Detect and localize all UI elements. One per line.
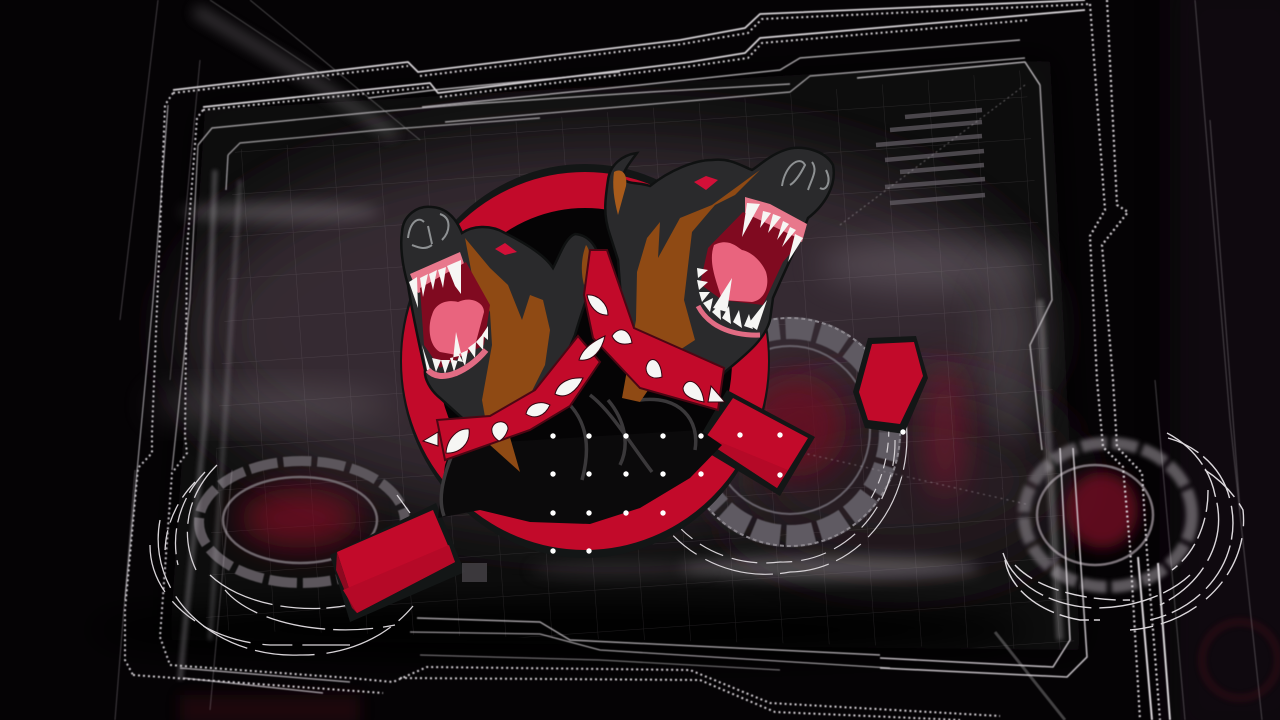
right dog collar: [584, 250, 725, 410]
left frame lines: [115, 0, 240, 720]
right dog lower teeth: [697, 268, 767, 330]
left dog ear tan: [582, 245, 590, 285]
right frame lines: [880, 0, 1262, 720]
right bar: [695, 390, 815, 496]
left dog mouth: [420, 262, 490, 368]
left dog head: [401, 207, 598, 472]
ring: [413, 177, 757, 545]
white dot grid: [550, 429, 906, 554]
left dog gum: [410, 252, 468, 293]
left dog eye: [495, 243, 517, 255]
top-left light streak: [195, 10, 395, 135]
data bars top right: [876, 110, 985, 203]
dog bodies: [438, 395, 722, 524]
left dog snout lines: [408, 214, 448, 248]
right dog snout lines: [782, 161, 828, 190]
right dog head: [605, 148, 834, 405]
bottom frame lines: [133, 618, 1065, 720]
left dog brown neck: [465, 238, 550, 472]
gauge: centre right: [668, 318, 907, 574]
left dog lower teeth: [422, 326, 488, 374]
left dog upper teeth: [409, 260, 461, 308]
collar spikes: [587, 295, 725, 402]
right dog ear tan: [613, 171, 626, 215]
left dog collar: [423, 336, 605, 460]
hexagon piece: [853, 336, 928, 434]
collar spikes: [423, 336, 605, 453]
left bar: [330, 503, 487, 622]
emblem: [330, 148, 928, 622]
right dog mouth: [700, 212, 802, 305]
right dog tongue: [712, 242, 767, 302]
top frame lines: [173, 0, 1090, 155]
gauge: right: [1003, 433, 1244, 630]
right dog upper teeth: [742, 203, 803, 262]
right dog brown neck: [622, 170, 760, 402]
target lines: [840, 85, 1025, 225]
right dog gum: [745, 197, 807, 242]
gauge: left: [150, 461, 413, 655]
left dog tongue: [430, 300, 484, 356]
right dog eye: [694, 176, 718, 190]
